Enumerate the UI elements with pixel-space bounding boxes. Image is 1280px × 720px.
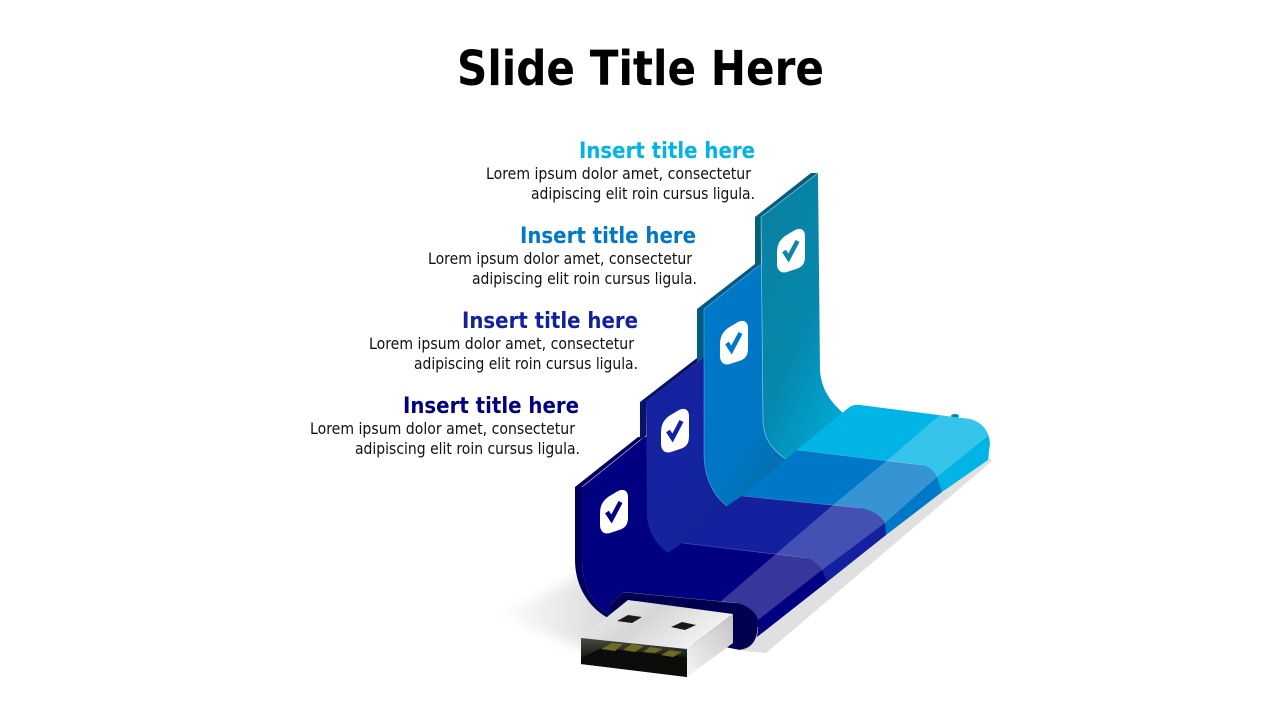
- text block: item 3: Lorem ipsum dolor amet, consectetur: [428, 249, 692, 268]
- icon: check badge 2: [661, 409, 689, 453]
- translucent highlight band: [720, 415, 988, 620]
- text block: item 2: Lorem ipsum dolor amet, consectetur: [369, 334, 634, 353]
- drop shadows: [497, 450, 992, 653]
- icon: check badge 4: [777, 229, 805, 273]
- USB top face: [581, 600, 733, 649]
- panel: step 1 navy: [575, 437, 840, 650]
- text block: item 2: adipiscing elit roin cursus ligula.: [414, 354, 638, 373]
- text block: item 3: [428, 224, 697, 288]
- text block: item 2: [369, 309, 638, 373]
- text block: item 4: Insert title here: [579, 139, 755, 164]
- text block: item 1: [310, 394, 580, 458]
- text block: item 3: Insert title here: [520, 224, 696, 249]
- text block: item 1: Lorem ipsum dolor amet, consectetur: [310, 419, 575, 438]
- USB opening: [581, 638, 687, 677]
- icon: USB connector: [581, 600, 733, 677]
- panel: step 3 blue: [697, 264, 945, 535]
- text block: item 4: adipiscing elit roin cursus ligula.: [531, 184, 755, 203]
- icon: check badge 3: [720, 321, 748, 365]
- text block: item 4: Lorem ipsum dolor amet, consectetur: [486, 164, 751, 183]
- USB tongue and contacts: [581, 643, 687, 677]
- text block: item 1: adipiscing elit roin cursus ligula.: [355, 439, 580, 458]
- USB side face: [687, 614, 733, 677]
- text block: item 2: Insert title here: [462, 309, 638, 334]
- text block: item 3: adipiscing elit roin cursus ligula.: [472, 269, 697, 288]
- text block: item 4: [486, 139, 755, 203]
- USB holes: [617, 615, 696, 630]
- title: Slide Title Here: [457, 41, 824, 97]
- text block: item 1: Insert title here: [403, 394, 579, 419]
- panel: step 4 teal: [755, 173, 990, 492]
- icon: check badge 1: [600, 490, 628, 534]
- panel: step 2 indigo: [640, 358, 895, 582]
